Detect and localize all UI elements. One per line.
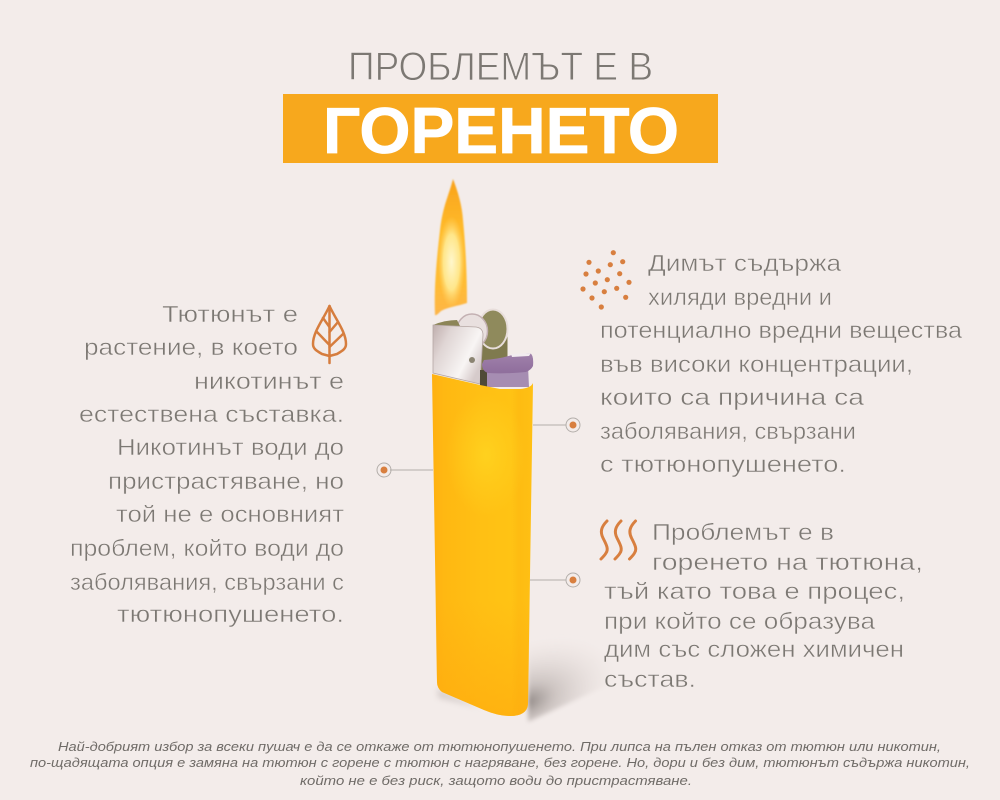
- right callout: top connector: [533, 418, 580, 432]
- footer disclaimer: Най-добрият избор за всеки пушач е да се откаже от тютюнопушенето. При липса на пълен отказ от тютюн или никотин,: [58, 739, 941, 754]
- text block: tobacco and nicotine: той не е основният: [116, 501, 344, 527]
- text block: smoke: заболявания, свързани: [600, 418, 856, 444]
- text block: combustion: [604, 519, 923, 692]
- footer disclaimer: който не е без риск, защото води до пристрастяване.: [300, 773, 692, 788]
- text block: smoke: потенциално вредни вещества: [600, 317, 963, 343]
- title banner: ГОРЕНЕТО: [323, 94, 679, 167]
- text block: tobacco and nicotine: Тютюнът е: [162, 301, 298, 327]
- lighter body: [432, 374, 533, 716]
- text block: smoke: с тютюнопушенето.: [600, 451, 846, 477]
- text block: tobacco and nicotine: пристрастяване, но: [108, 468, 344, 494]
- right callout: bottom connector: [530, 573, 580, 587]
- text block: smoke: хиляди вредни и: [648, 284, 832, 310]
- text block: tobacco and nicotine: [70, 301, 344, 627]
- icon: heat waves: [601, 521, 636, 559]
- text block: tobacco and nicotine: Никотинът води до: [117, 434, 344, 460]
- striker wheels: [433, 310, 508, 374]
- text block: tobacco and nicotine: никотинът е: [194, 368, 344, 394]
- text block: tobacco and nicotine: проблем, който води до: [70, 535, 344, 561]
- icon: tobacco leaf: [313, 306, 346, 363]
- text block: smoke: [600, 250, 963, 477]
- lighter shadow: [528, 610, 640, 722]
- purple button: [480, 353, 533, 388]
- text block: tobacco and nicotine: тютюнопушенето.: [117, 601, 344, 627]
- lighter illustration: [432, 179, 640, 722]
- text block: smoke: във високи концентрации,: [600, 351, 913, 377]
- text block: combustion: тъй като това е процес,: [604, 578, 905, 604]
- text block: tobacco and nicotine: заболявания, свързани с: [70, 569, 344, 595]
- footer disclaimer: [30, 739, 970, 788]
- icon: smoke particles: [580, 250, 632, 310]
- text block: smoke: които са причина са: [600, 384, 865, 410]
- text block: combustion: горенето на тютюна,: [652, 549, 923, 575]
- text block: tobacco and nicotine: естествена съставка.: [79, 401, 344, 427]
- text block: combustion: състав.: [604, 666, 696, 692]
- text block: smoke: Димът съдържа: [648, 250, 842, 276]
- text block: combustion: Проблемът е в: [652, 519, 834, 545]
- footer disclaimer: по-щадящата опция е замяна на тютюн с горене с тютюн с нагряване, без горене. Но, дори и без дим, тютюнът съдържа никотин,: [30, 755, 970, 770]
- left callout: connector: [377, 463, 433, 477]
- text block: combustion: дим със сложен химичен: [604, 636, 904, 662]
- flame: [435, 179, 467, 315]
- text block: tobacco and nicotine: растение, в което: [84, 334, 298, 360]
- title: line one: ПРОБЛЕМЪТ Е В: [348, 45, 653, 89]
- metal hood: [433, 325, 483, 384]
- text block: combustion: при който се образува: [604, 608, 876, 634]
